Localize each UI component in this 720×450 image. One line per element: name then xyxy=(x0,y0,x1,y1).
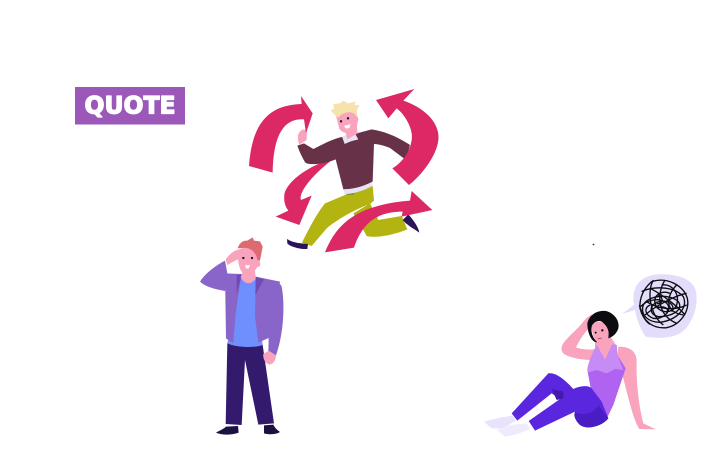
hands xyxy=(263,351,276,365)
trousers xyxy=(226,343,274,425)
man: shirt hem and collar xyxy=(343,182,373,194)
jacket body xyxy=(225,273,280,343)
man: sweater xyxy=(297,129,410,189)
hair xyxy=(238,237,263,261)
man: hand xyxy=(298,129,307,145)
quote badge: QUOTE xyxy=(84,92,176,120)
thought bubble xyxy=(622,274,697,338)
raised arm xyxy=(562,314,598,360)
face xyxy=(595,329,603,339)
t-shirt xyxy=(227,277,263,347)
man: front shoe xyxy=(287,239,308,249)
arrow: bottom xyxy=(325,191,432,252)
socks xyxy=(484,416,516,428)
shoes xyxy=(216,426,239,435)
tiny dot xyxy=(593,244,594,245)
hair xyxy=(587,311,619,342)
figure: confused man xyxy=(200,237,283,435)
quote badge xyxy=(75,87,185,124)
arrow: right xyxy=(376,89,439,185)
neck and chest xyxy=(595,333,616,362)
man: back leg xyxy=(353,203,407,237)
neck and head xyxy=(241,270,256,283)
head xyxy=(592,322,608,342)
arrow: top left xyxy=(249,96,313,173)
man: back shoe xyxy=(403,214,419,233)
man: neck and head xyxy=(345,125,358,139)
scribble xyxy=(639,280,688,328)
legs xyxy=(512,373,608,431)
tank top xyxy=(587,344,626,420)
raised arm xyxy=(200,261,227,291)
figure: sitting woman with thought bubble xyxy=(484,274,697,437)
arrow: lower left xyxy=(276,159,333,225)
lowered arm xyxy=(268,284,283,355)
man: face xyxy=(340,117,351,129)
figure: running man with arrows xyxy=(249,89,439,252)
man: front leg xyxy=(302,186,374,246)
man: hair xyxy=(331,101,359,118)
face xyxy=(242,257,253,269)
back arm xyxy=(617,347,656,429)
